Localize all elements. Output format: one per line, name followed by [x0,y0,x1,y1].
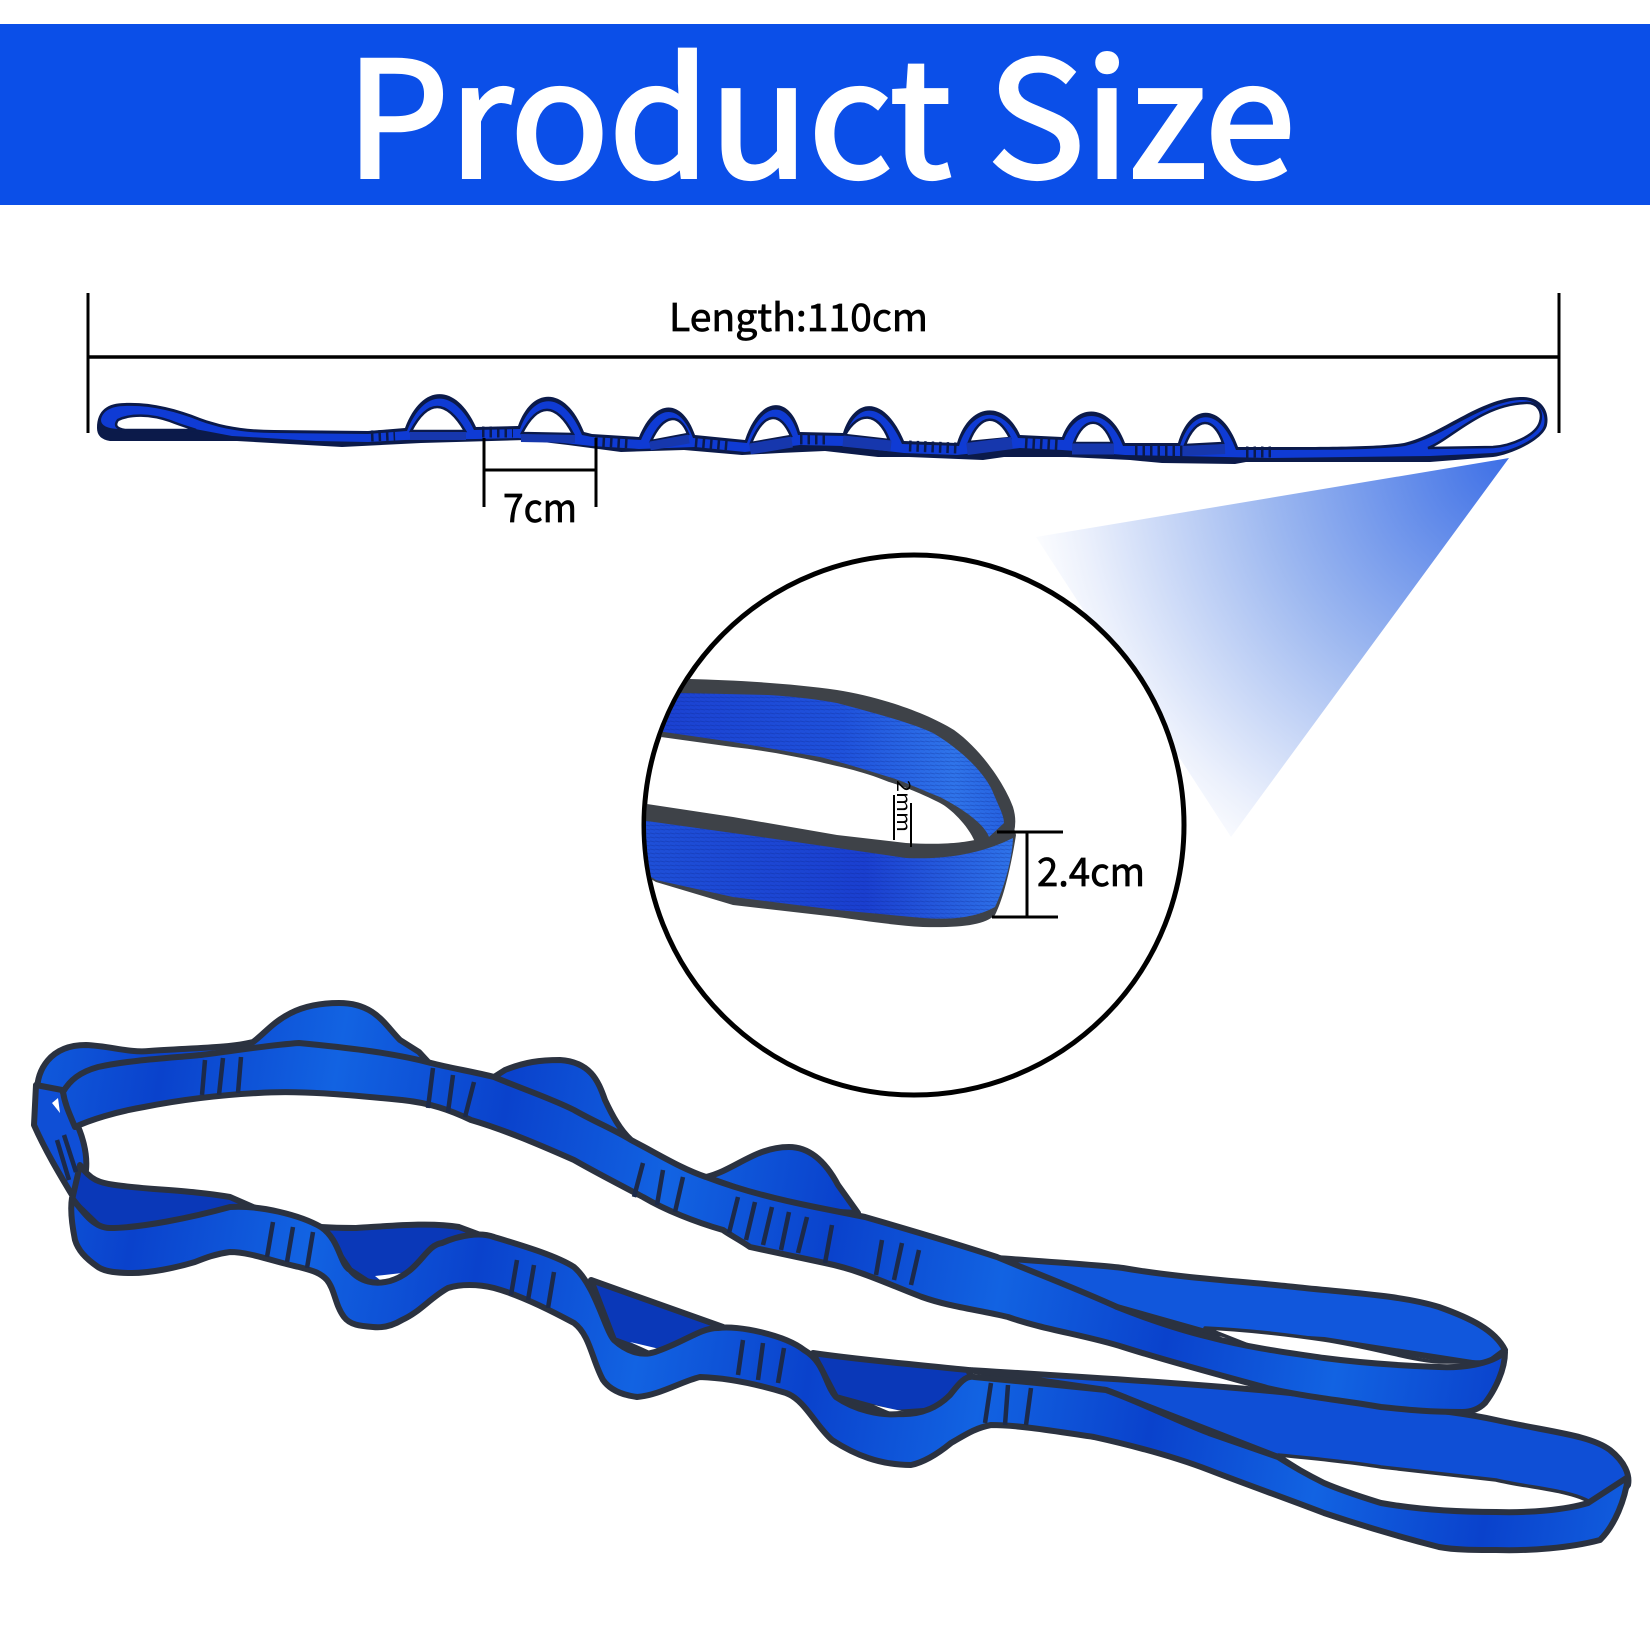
top strap bar tacks [371,432,1272,452]
strap small gaps [52,1098,920,1416]
bottom loop back band [968,1370,1628,1512]
bottom strap bar tacks [57,1057,1031,1425]
2.4cm label: 2.4cm [1037,842,1145,898]
2mm label: 2mm [891,780,918,832]
strap back humps [37,1003,858,1213]
7cm label: 7cm [503,478,577,534]
top strap [97,394,1548,464]
strap upper front strand [63,1043,1505,1412]
2.4cm dimension [992,832,1145,917]
length dimension [88,287,1559,433]
top loop hole [1205,1328,1486,1375]
bottom loop hole [1278,1455,1590,1520]
large strap photo [34,1003,1628,1550]
title banner [0,0,1650,224]
7cm spacing dimension [484,438,596,534]
length label: Length:110cm [669,287,928,342]
magnified strap [635,678,1016,927]
strap left turn [34,1085,86,1195]
top strap back layer [410,436,1225,451]
magnifier circle [635,555,1184,1095]
2mm dimension [891,780,918,847]
top loop back band [997,1258,1505,1365]
strap lower front strand [71,1198,1628,1550]
top strap loop and daisy holes [116,403,1541,448]
strap lower back pieces [72,1165,974,1413]
zoom beam [1036,458,1509,837]
